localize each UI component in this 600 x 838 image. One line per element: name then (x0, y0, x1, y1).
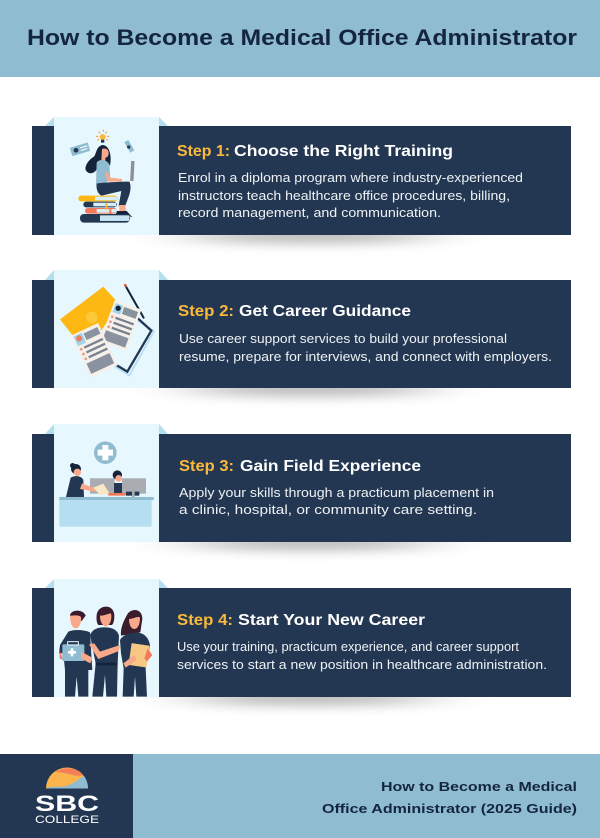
step 4 heading: Step 4: (177, 612, 233, 629)
footer (0, 754, 600, 838)
icon: woman on books with laptop (70, 130, 135, 223)
step 1 heading: Step 1: (177, 143, 230, 160)
icon: three healthcare workers (59, 607, 152, 697)
step 2 text (179, 331, 552, 364)
step 1 text (178, 170, 523, 220)
step 3 text: Apply your skills through a practicum placement in (179, 485, 494, 500)
title: How to Become a Medical Office Administrator (27, 25, 577, 50)
step 1 text: Enrol in a diploma program where industry-experienced (178, 170, 523, 185)
logo: SBC College (35, 768, 99, 826)
step 2 heading: Step 2: (178, 303, 234, 320)
step 4 heading (177, 612, 425, 629)
step 3 heading: Gain Field Experience (240, 458, 421, 475)
icon: folder, resumes and clipboard (60, 284, 154, 378)
step 2 text: resume, prepare for interviews, and connect with employers. (179, 349, 552, 364)
step 4 text (177, 639, 547, 672)
step 1 text: record management, and communication. (178, 205, 441, 220)
panel: step 1 (32, 117, 571, 243)
step 4 text: services to start a new position in healthcare administration. (177, 657, 547, 672)
logo: SBC College: SBC (35, 791, 99, 816)
step 1 heading: Choose the Right Training (234, 143, 453, 160)
footer source text: How to Become a Medical (381, 780, 577, 794)
panel: step 3 (32, 424, 571, 550)
footer source text: Office Administrator (2025 Guide) (322, 802, 577, 816)
icon: reception desk with staff (59, 441, 154, 527)
step 3 text: a clinic, hospital, or community care setting. (179, 502, 477, 517)
step 3 heading (179, 458, 421, 475)
step 1 text: instructors teach healthcare office procedures, billing, (178, 188, 510, 203)
worker centre (89, 607, 120, 697)
panel: step 2 (32, 270, 571, 396)
footer source text (322, 780, 577, 816)
step 2 heading (178, 303, 411, 320)
header banner (0, 0, 600, 77)
step 4 heading: Start Your New Career (238, 612, 425, 629)
step 2 text: Use career support services to build your professional (179, 331, 507, 346)
step 2 heading: Get Career Guidance (239, 303, 411, 320)
step 3 text (179, 485, 494, 517)
worker right (120, 610, 152, 697)
worker left (59, 611, 92, 697)
logo: SBC College: COLLEGE (35, 814, 99, 826)
step 4 text: Use your training, practicum experience, and career support (177, 639, 519, 654)
step 3 heading: Step 3: (179, 458, 234, 475)
panel: step 4 (32, 579, 571, 705)
